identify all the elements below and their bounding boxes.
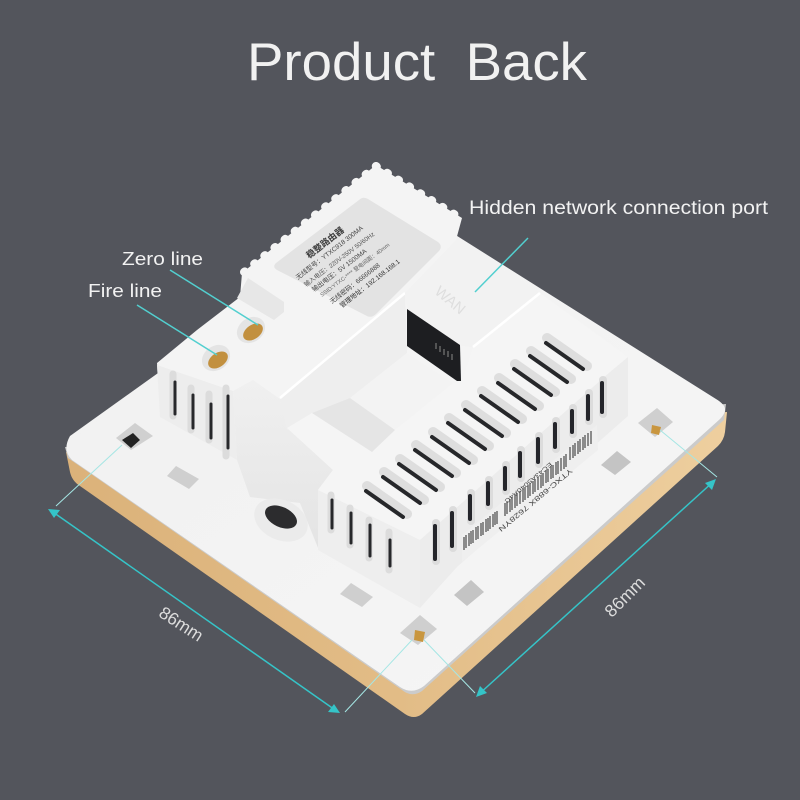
callout: fire line: Fire line (88, 281, 162, 301)
wall plate (65, 200, 727, 717)
router module body (157, 165, 628, 608)
left hole (116, 423, 153, 450)
mounting holes and tabs (116, 408, 673, 645)
dimension: right 86mm (424, 430, 717, 697)
tab centre right (454, 580, 484, 606)
dimension: right 86mm: 86mm (600, 572, 649, 621)
recess back wall (280, 293, 407, 430)
right hole (638, 408, 673, 437)
tab right (601, 451, 631, 475)
bottom hole (400, 615, 437, 645)
product label: SSID:YTXC-**** 登电间距：40mm (318, 241, 391, 299)
product label (274, 198, 441, 317)
grey pad below port (312, 398, 395, 452)
WAN emboss: WAN (431, 283, 469, 318)
ridge highlight (280, 293, 405, 398)
callout: fire line (88, 281, 217, 355)
barcode sticker: YTXC-688X 7628YN (497, 466, 573, 532)
screw boss (247, 490, 315, 550)
screw terminals (197, 312, 270, 376)
main top surface (287, 293, 628, 540)
tab centre left (340, 583, 373, 607)
recess floor (350, 353, 453, 430)
callout: hidden network port: Hidden network connection port (469, 198, 769, 219)
left wall vents (173, 374, 228, 456)
callout: hidden network port (469, 198, 769, 292)
product label: 稳整路由器 (304, 224, 346, 260)
right vented wall (420, 357, 628, 608)
gold plate edge (66, 412, 727, 717)
barcode sticker (462, 425, 598, 562)
WAN block ridge (473, 293, 540, 347)
fire line terminal (197, 340, 235, 376)
front wall vents (331, 495, 390, 570)
notch wall (233, 380, 333, 548)
silver plate edge (65, 404, 726, 694)
white plate face (66, 200, 725, 691)
terminal recess (237, 278, 284, 320)
callout: zero line: Zero line (122, 249, 203, 269)
WAN block (405, 240, 540, 347)
body silhouette (157, 165, 628, 608)
callout: zero line (122, 249, 258, 325)
product label: 输入电压：220V-250V 50/60Hz (302, 230, 376, 289)
left vented wall (157, 365, 237, 460)
front vented wall (318, 490, 420, 608)
product label: 无线型号：YTXC918 300MA (294, 223, 365, 282)
product label: 管理地址：192.168.168.1 (338, 257, 402, 310)
scalloped top edges (244, 166, 459, 272)
title: Product Back (247, 33, 588, 92)
product label: 输出电压：5V 1500MA (310, 246, 369, 294)
right wall vents (435, 380, 603, 561)
RJ45 port (407, 309, 461, 381)
top slots (366, 338, 587, 517)
product label: 无线密码：66666888 (328, 260, 382, 306)
barcode sticker: EC43A5040A4C (502, 460, 553, 504)
tab left (167, 466, 199, 489)
dimension: left 86mm (48, 445, 412, 713)
dimension: left 86mm: 86mm (155, 602, 207, 646)
zero line terminal (232, 312, 270, 348)
